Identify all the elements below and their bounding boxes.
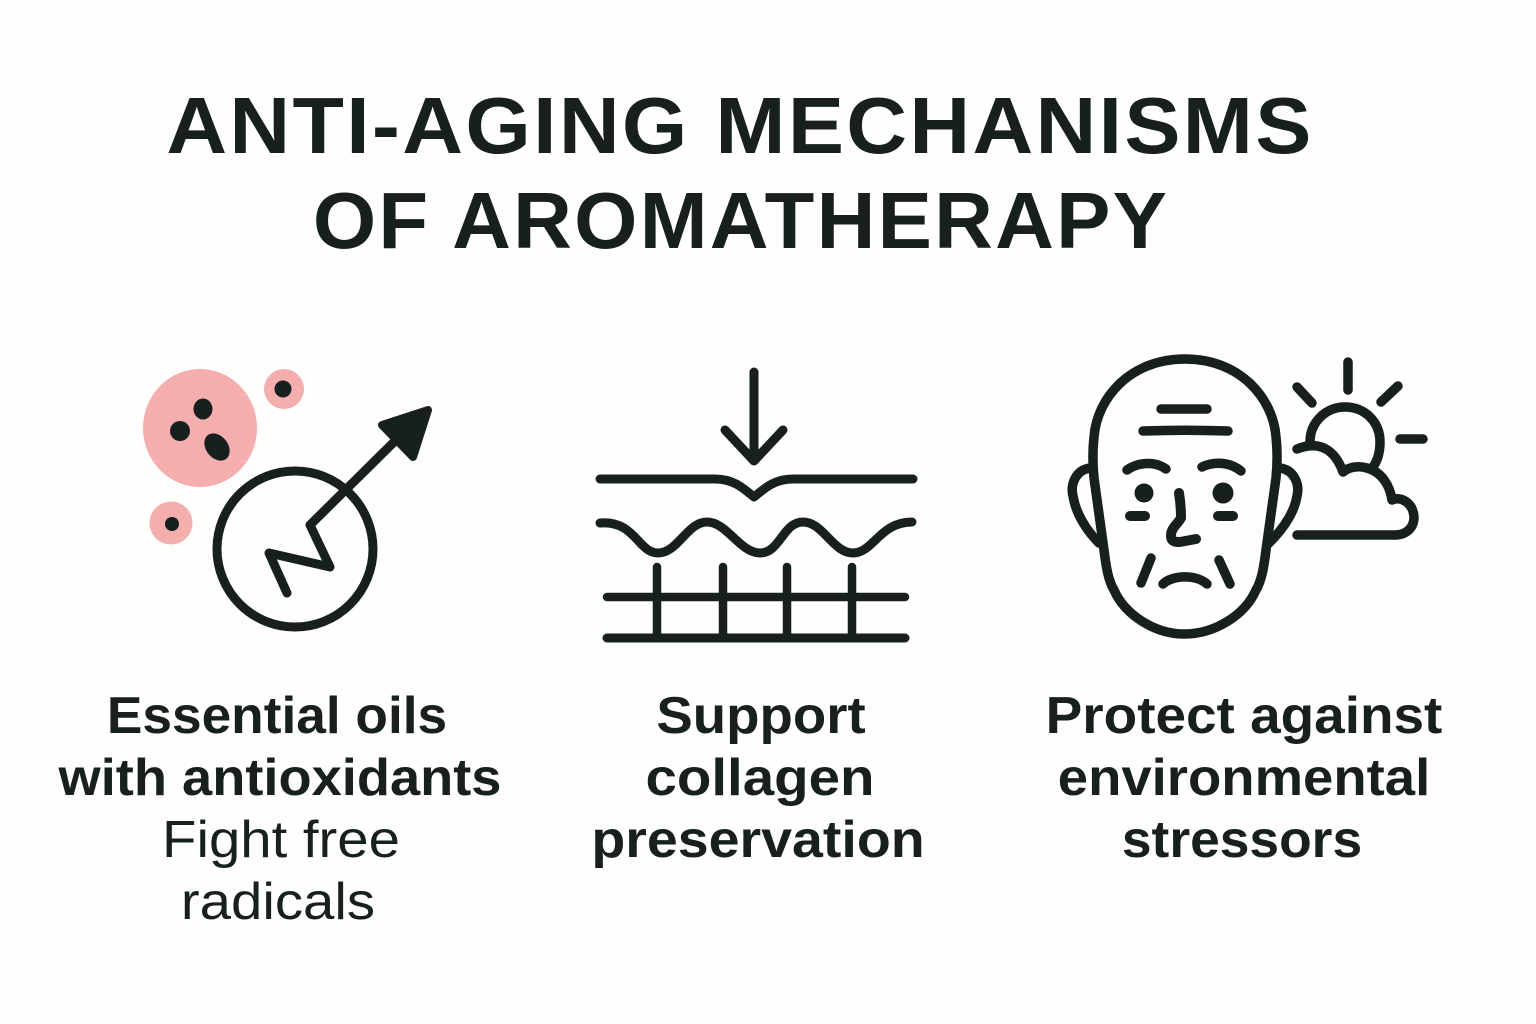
- icon: free radicals and antioxidant: [143, 369, 428, 627]
- caption: antioxidants: with antioxidants: [59, 749, 501, 807]
- title: OF AROMATHERAPY: [313, 176, 1169, 265]
- caption: collagen: preservation: [591, 811, 925, 869]
- caption: collagen: [591, 687, 925, 869]
- title: [166, 81, 1314, 265]
- caption: antioxidants: [58, 687, 501, 931]
- icon: aged face with sun and cloud: [1072, 359, 1423, 634]
- caption: antioxidants: Essential oils: [107, 687, 447, 745]
- caption: collagen: Support: [656, 687, 866, 745]
- caption: environmental stressors: [1046, 687, 1442, 869]
- caption: environmental stressors: environmental: [1058, 749, 1430, 807]
- caption: environmental stressors: stressors: [1122, 811, 1362, 869]
- caption: antioxidants: radicals: [181, 873, 375, 931]
- title: ANTI-AGING MECHANISMS: [166, 81, 1314, 170]
- caption: environmental stressors: Protect against: [1046, 687, 1442, 745]
- icon: collagen skin layers: [600, 372, 913, 638]
- caption: antioxidants: Fight free: [162, 811, 400, 869]
- caption: collagen: collagen: [645, 749, 875, 807]
